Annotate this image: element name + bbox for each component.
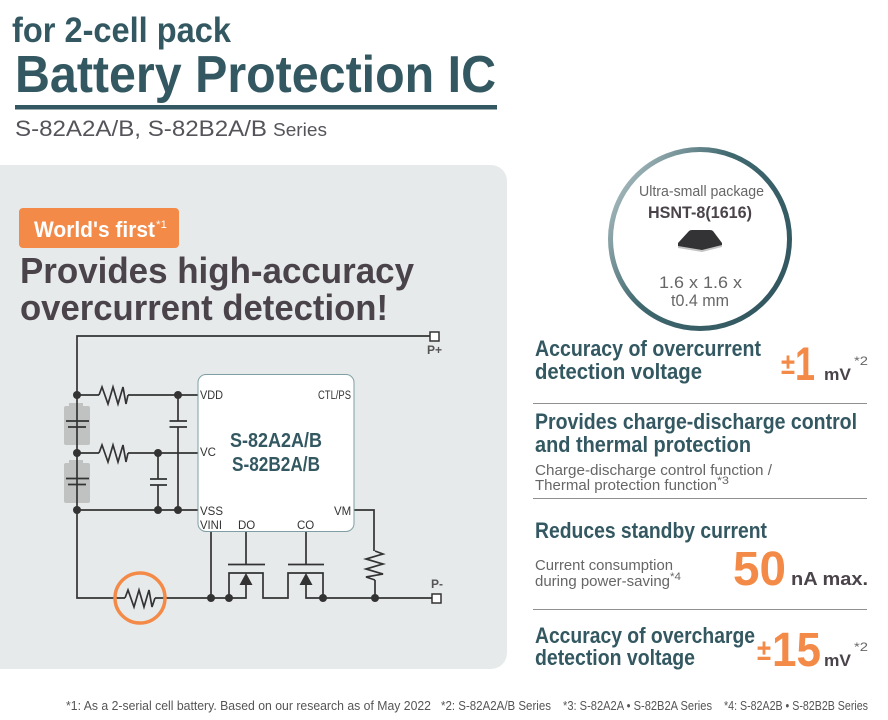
value: ±15 mV: *2 [854, 640, 868, 654]
feature: charge-discharge control: Thermal protection function [535, 478, 717, 494]
pin labels: VSS [200, 506, 223, 518]
battery cells [64, 403, 90, 503]
feature: standby current: Reduces standby current [535, 518, 768, 543]
pin labels: CO [297, 520, 314, 532]
chip name [230, 430, 322, 476]
highlight circle on sense resistor [115, 573, 165, 623]
value: ±15 mV [757, 624, 868, 677]
package callout: Ultra-small package [639, 183, 764, 200]
pin labels: VINI [200, 520, 222, 532]
pin labels [200, 390, 351, 532]
terminal P+: P+ [427, 343, 442, 357]
badge: world's first: World's first [34, 217, 156, 242]
value: ±15 mV: ± [757, 634, 771, 667]
panel background [0, 165, 507, 669]
footnotes: *1: As a 2-serial cell battery. Based on our research as of May 2022 [66, 699, 431, 713]
value: ±1 mV: 1 [795, 337, 815, 390]
feature: standby current [535, 518, 868, 596]
resistors [99, 387, 383, 607]
feature: charge-discharge control: Charge-discharge control function / [535, 463, 773, 479]
chip name: S-82B2A/B [232, 454, 320, 476]
footnotes [66, 699, 868, 713]
value: ±15 mV: mV [824, 651, 852, 670]
feature: charge-discharge control: Provides charge-discharge control [535, 409, 857, 434]
footnotes: *4: S-82A2B • S-82B2B Series [724, 699, 868, 713]
feature: standby current: Current consumption [535, 558, 673, 574]
value: ±1 mV [781, 337, 868, 390]
feature: overcharge accuracy [535, 623, 868, 677]
footnotes: *2: S-82A2A/B Series [441, 699, 551, 713]
panel: circuit [0, 165, 507, 669]
value: ±1 mV: *2 [854, 354, 868, 368]
junction nodes [73, 391, 379, 602]
feature: overcurrent accuracy [535, 336, 868, 390]
value: 50 nA max.: 50 [733, 543, 786, 596]
main title: Battery Protection IC [15, 46, 496, 104]
value: ±1 mV: mV [824, 365, 852, 384]
feature: standby current: during power-saving [535, 574, 670, 590]
feature: charge-discharge control [535, 409, 857, 494]
feature: overcurrent accuracy: detection voltage [535, 359, 702, 384]
panel headline [20, 250, 414, 328]
package callout: HSNT-8(1616) [648, 203, 752, 222]
terminal P-: P- [431, 577, 443, 591]
terminal P- [431, 577, 443, 603]
pin labels: CTL/PS [318, 390, 351, 402]
circuit diagram [64, 332, 443, 623]
feature: standby current: *4 [670, 571, 681, 583]
terminal P+ [427, 332, 442, 357]
value: 50 nA max. [733, 543, 868, 596]
ring [610, 150, 790, 328]
wiring [66, 336, 432, 598]
chip name: S-82A2A/B [230, 430, 322, 452]
series names: Series [273, 120, 327, 140]
badge: world's first: *1 [156, 219, 167, 231]
feature: charge-discharge control: *3 [717, 475, 729, 487]
pin labels: DO [238, 520, 255, 532]
panel headline: Provides high-accuracy [20, 250, 414, 291]
value: ±15 mV: 15 [772, 624, 821, 677]
package callout: 1.6 x 1.6 x [659, 273, 743, 292]
package callout [610, 150, 790, 328]
pin labels: VDD [200, 390, 223, 402]
feature: charge-discharge control: and thermal protection [535, 432, 751, 457]
title underline [15, 105, 497, 110]
icon: chip package [678, 230, 722, 252]
panel headline: overcurrent detection! [20, 287, 388, 328]
feature: overcurrent accuracy: Accuracy of overcurrent [535, 336, 762, 361]
value: 50 nA max.: nA max. [791, 569, 868, 589]
capacitor plates [66, 421, 89, 484]
feature: overcharge accuracy: detection voltage [535, 645, 695, 670]
subtitle: for 2-cell pack: for 2-cell pack [12, 11, 231, 50]
series names: S-82A2A/B, S-82B2A/B [15, 116, 267, 141]
footnotes: *3: S-82A2A • S-82B2A Series [563, 699, 712, 713]
badge: world's first [19, 208, 179, 248]
pin labels: VC [200, 447, 216, 459]
pin labels: VM [334, 506, 351, 518]
value: ±1 mV: ± [781, 348, 795, 381]
feature: overcharge accuracy: Accuracy of overcharge [535, 623, 755, 648]
title block [12, 11, 497, 141]
package callout: t0.4 mm [671, 291, 729, 310]
IC chip [198, 374, 354, 532]
